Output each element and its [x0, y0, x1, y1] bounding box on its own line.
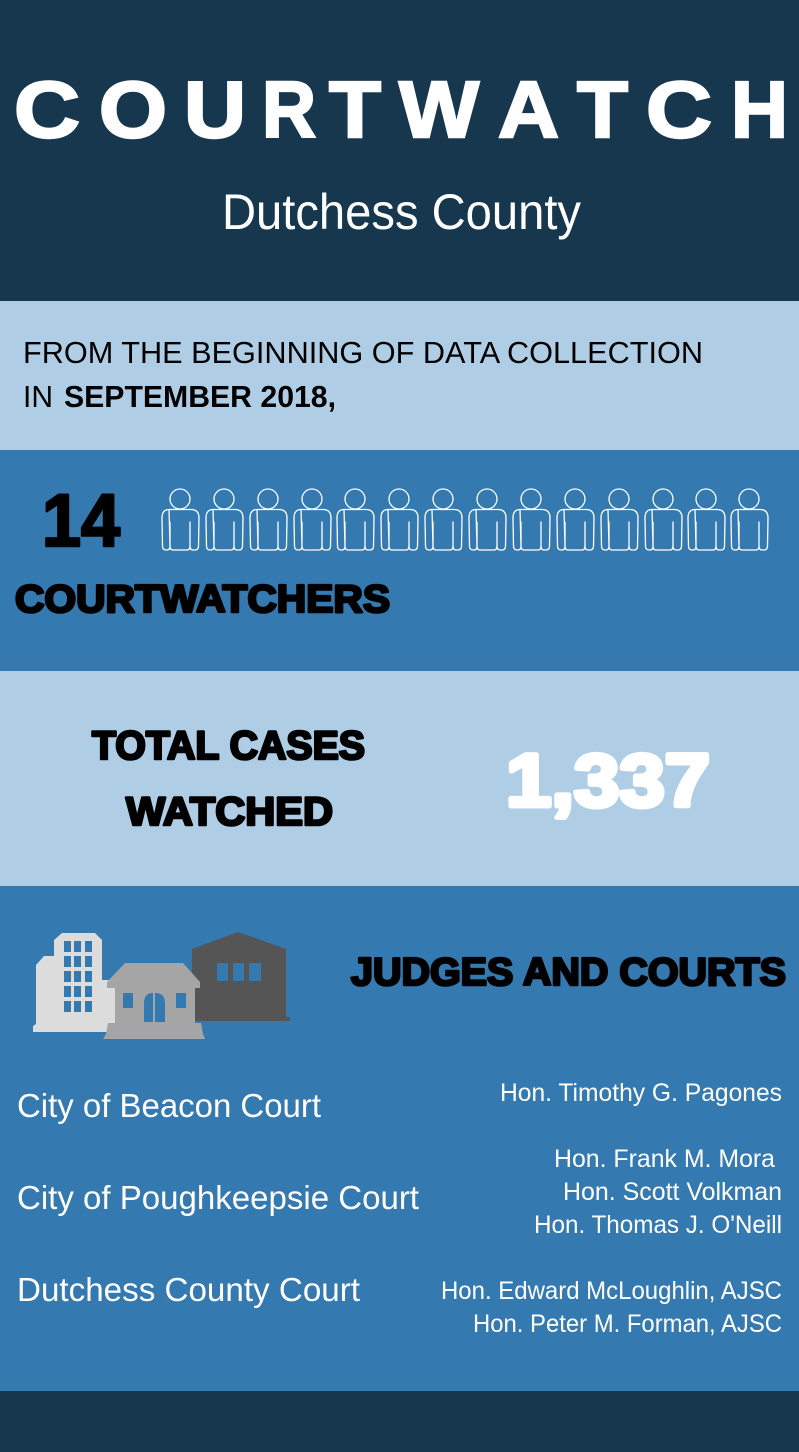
judge: pagones: Hon. Timothy G. Pagones: [500, 1079, 782, 1107]
court: dutchess county: Dutchess County Court: [17, 1271, 360, 1308]
footer band: [0, 1391, 799, 1452]
title: T: [329, 65, 381, 154]
title: W: [399, 65, 480, 154]
judge: volkman: Hon. Scott Volkman: [563, 1178, 782, 1206]
title: H: [731, 65, 788, 154]
icon: grey courthouse: [103, 963, 205, 1039]
subtitle: Dutchess County: [222, 184, 581, 240]
number: 1,337: 1,337: [506, 739, 710, 822]
judge: forman: Hon. Peter M. Forman, AJSC: [473, 1310, 782, 1338]
icon: court buildings: [33, 932, 290, 1039]
number: 14: 14: [42, 479, 120, 562]
title: [14, 65, 788, 154]
label: total cases: TOTAL CASES: [92, 724, 365, 768]
intro line 2: SEPTEMBER 2018,: [64, 379, 336, 414]
title: R: [262, 65, 316, 154]
court: poughkeepsie: City of Poughkeepsie Court: [17, 1179, 419, 1216]
judge: o'neill: Hon. Thomas J. O'Neill: [534, 1211, 782, 1239]
title: A: [498, 65, 559, 154]
title: T: [577, 65, 628, 154]
court: beacon: City of Beacon Court: [17, 1087, 321, 1124]
panel: intro: [0, 301, 799, 450]
judge: mcloughlin: Hon. Edward McLoughlin, AJSC: [441, 1277, 782, 1305]
panel: judges and courts: [0, 886, 799, 1391]
label: courtwatchers: COURTWATCHERS: [15, 578, 390, 621]
label: watched: WATCHED: [126, 790, 333, 834]
judge: mora: Hon. Frank M. Mora: [554, 1145, 775, 1173]
icon: light tower: [33, 933, 115, 1032]
intro line 1: FROM THE BEGINNING OF DATA COLLECTION: [23, 335, 703, 370]
title: U: [184, 65, 246, 154]
panel: courtwatchers: [0, 450, 799, 671]
panel: header: [0, 0, 799, 301]
panel: total cases: [0, 671, 799, 886]
title: C: [14, 65, 80, 154]
title: C: [646, 65, 712, 154]
title: O: [99, 65, 167, 154]
intro line 2: IN: [23, 379, 53, 414]
icons: 14 people: [162, 489, 768, 550]
heading: judges and courts: JUDGES AND COURTS: [351, 951, 786, 994]
icon: dark warehouse: [192, 932, 290, 1021]
